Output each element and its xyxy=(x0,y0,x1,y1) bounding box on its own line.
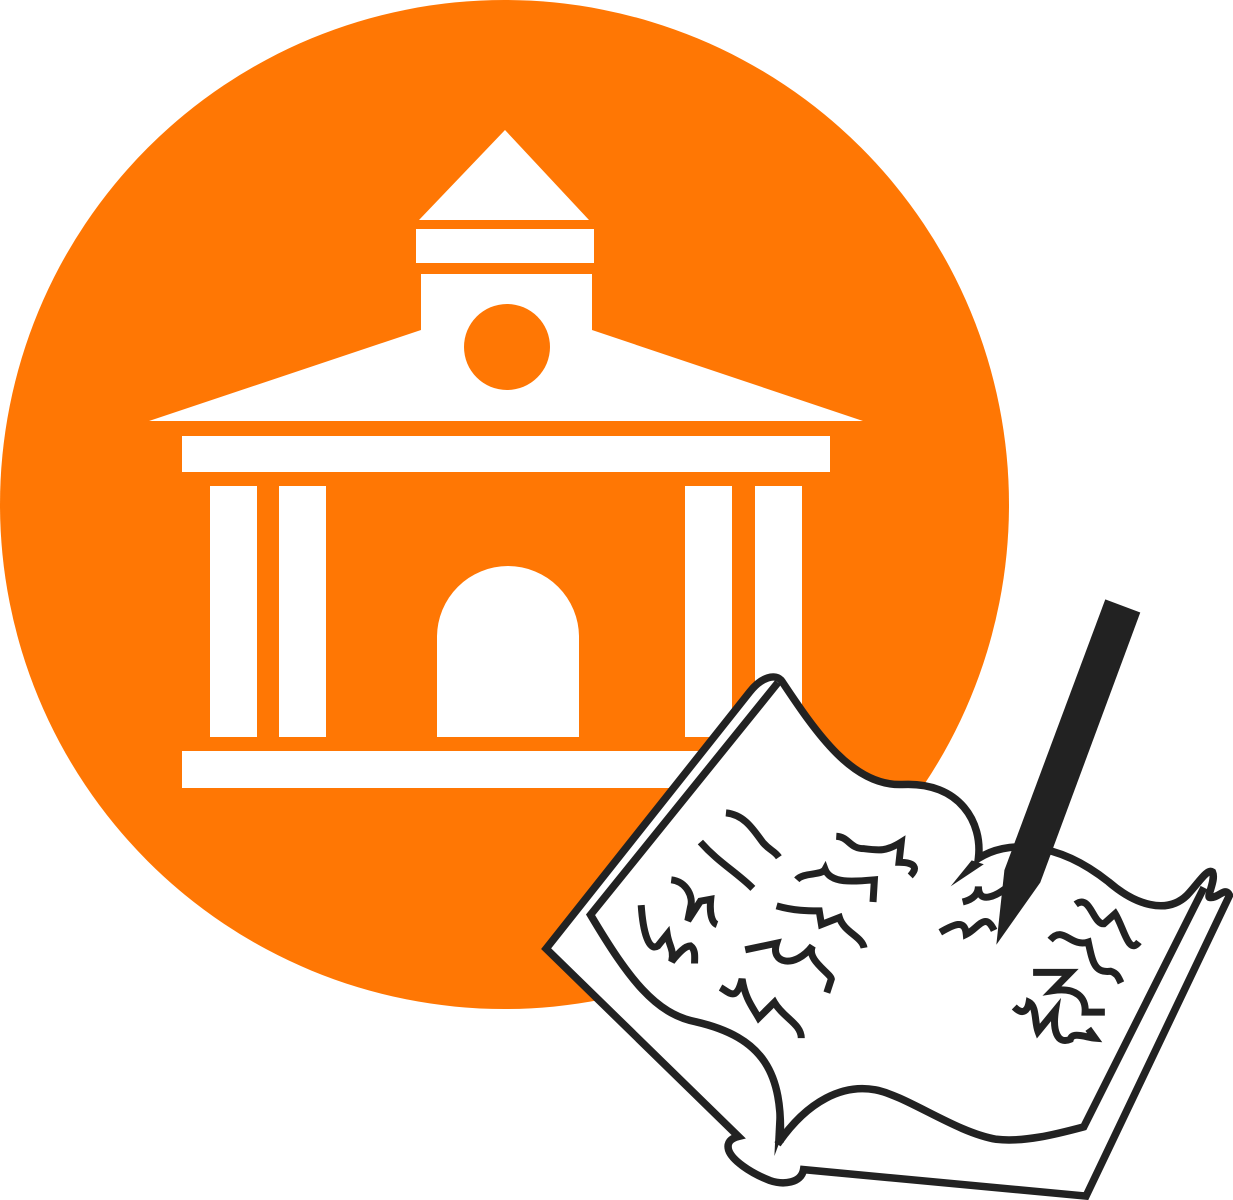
icon: orange circle background xyxy=(0,0,1009,1009)
building column 1 xyxy=(210,486,257,737)
book page fold point xyxy=(951,860,984,886)
building base xyxy=(182,751,722,788)
book outline xyxy=(546,677,1230,1196)
pen xyxy=(996,599,1140,945)
building cupola roof xyxy=(419,130,589,220)
book left page edge xyxy=(591,683,781,1142)
building clock circle xyxy=(464,304,550,390)
building entablature xyxy=(182,436,830,472)
building cupola band xyxy=(416,229,594,263)
book bottom page edge xyxy=(778,888,1204,1144)
building arched door xyxy=(437,566,579,737)
icon: classical building xyxy=(149,130,863,788)
book gutter point xyxy=(774,1111,784,1156)
handwriting scribbles xyxy=(641,813,1139,1041)
building pediment and tower xyxy=(149,274,863,421)
building column 2 xyxy=(279,486,326,737)
building column 3 xyxy=(685,486,732,737)
building column 4 xyxy=(755,486,802,737)
icon: open book with writing xyxy=(546,599,1230,1196)
